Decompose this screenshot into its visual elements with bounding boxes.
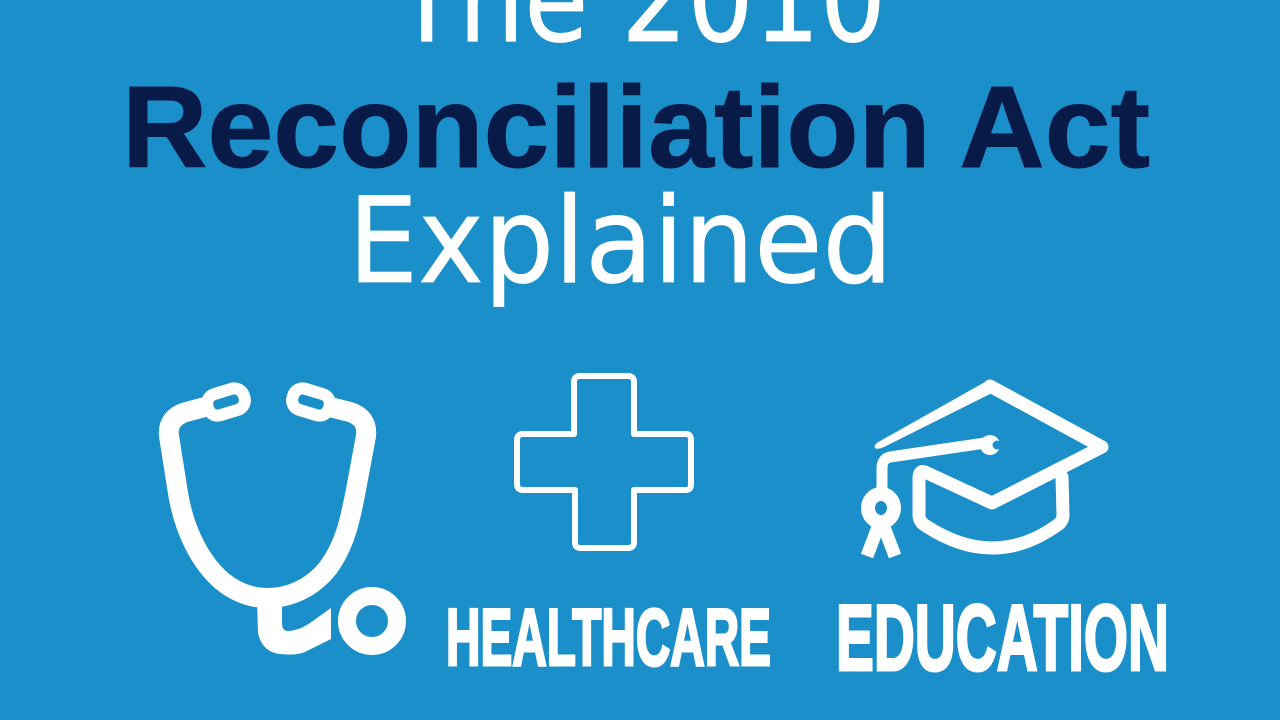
title line: Reconciliation Act: Reconciliation Act xyxy=(122,62,1150,192)
title line: Explained: Explained xyxy=(348,173,893,311)
title xyxy=(122,0,1150,311)
icon: stethoscope xyxy=(169,386,397,655)
icon: graduation cap xyxy=(867,382,1102,556)
icon: medical cross xyxy=(517,376,691,548)
label: healthcare: HEALTHCARE xyxy=(446,593,771,683)
